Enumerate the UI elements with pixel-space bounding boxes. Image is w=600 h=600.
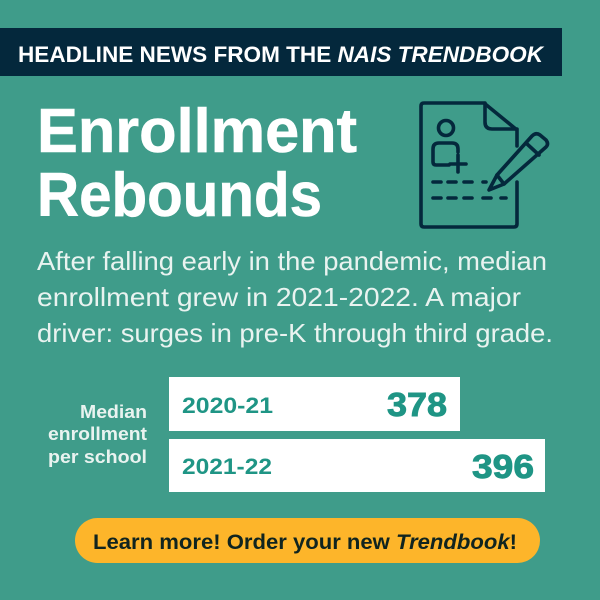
intro text: After falling early in the pandemic, median xyxy=(37,246,547,276)
bar: 2020-21 xyxy=(169,377,460,431)
bar: 2021-22: 396 xyxy=(472,448,534,485)
icon: enrollment form with pencil xyxy=(421,103,548,227)
title: Rebounds xyxy=(37,161,322,230)
axis label: median enrollment per school xyxy=(48,402,147,467)
bar: 2021-22 xyxy=(169,439,545,492)
intro text: enrollment grew in 2021-2022. A major xyxy=(37,282,521,312)
bar: 2021-22: 2021-22 xyxy=(182,454,272,479)
intro text: driver: surges in pre-K through third grade. xyxy=(37,318,553,348)
bar: 2020-21: 378 xyxy=(387,386,447,423)
title xyxy=(37,97,357,230)
axis label: median enrollment per school: Median xyxy=(80,402,147,422)
bar: 2020-21: 2020-21 xyxy=(182,393,273,418)
axis label: median enrollment per school: per school xyxy=(48,447,147,467)
title: Enrollment xyxy=(37,97,357,166)
intro text xyxy=(37,246,553,348)
call to action button: Learn more! Order your new Trendbook ! xyxy=(93,531,517,554)
header banner: HEADLINE NEWS FROM THE NAIS TRENDBOOK xyxy=(18,42,545,67)
header banner xyxy=(0,28,562,76)
axis label: median enrollment per school: enrollment xyxy=(48,424,147,444)
call to action button xyxy=(75,518,540,563)
